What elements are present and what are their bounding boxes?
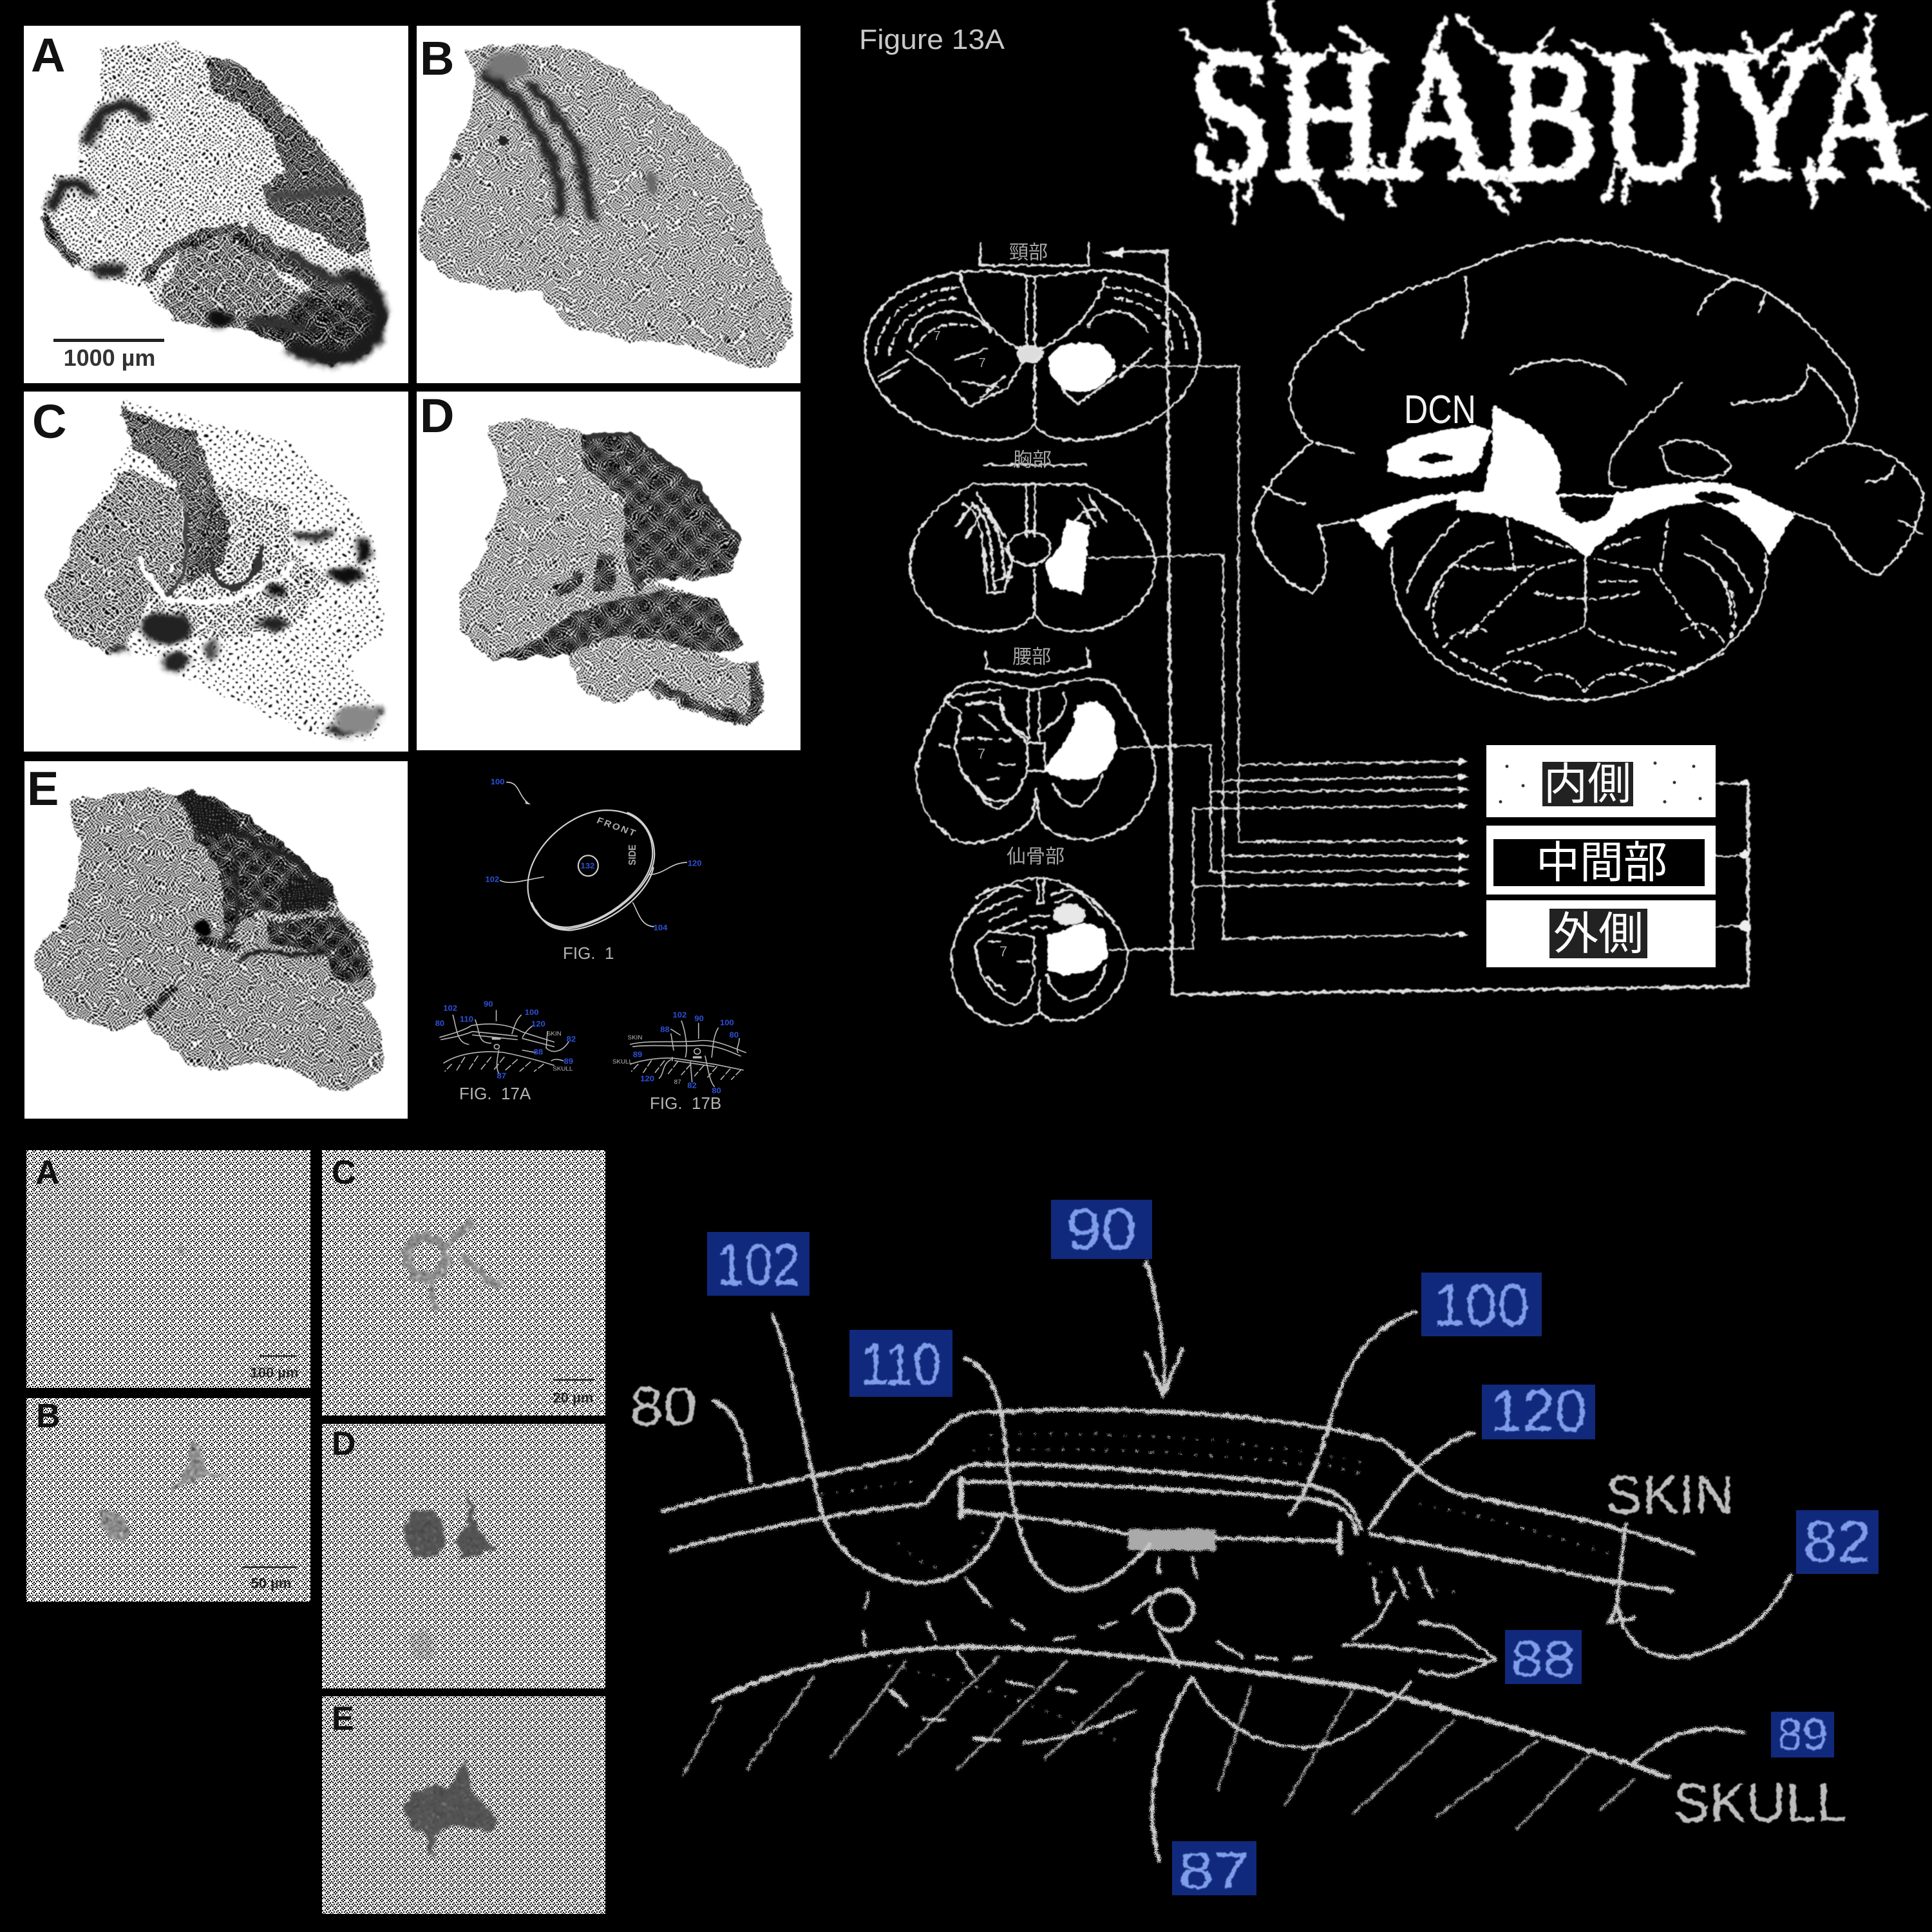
panel: cerebellum C [24,392,408,752]
anatomy words: SKIN [547,1030,562,1037]
blue numbers [633,1011,739,1095]
section: cervical [865,243,1200,440]
scale text: 100 µm [250,1365,299,1381]
heading: figure 13A: Figure 13A [859,24,1005,55]
box: medial [1486,745,1716,817]
figure: large sketch of implant under skin [630,1197,1879,1899]
section labels: 7 [978,746,985,762]
anatomy words: 87 [674,1079,681,1085]
blue numbers: 120 [531,1020,545,1028]
caption FIG. 17B: FIG. 17B [650,1094,721,1113]
blue label boxes [707,1200,1879,1895]
handwritten blue numbers [717,1197,1871,1899]
panel: cerebellum B [417,26,800,383]
scale text: 50 µm [251,1575,291,1591]
handwritten blue numbers: 87 [1179,1842,1249,1899]
section labels [933,242,1065,960]
section labels: 頸部 [1009,242,1048,263]
blue numbers: 104 [654,923,668,932]
sketch lines [662,1263,1790,1861]
figure: FIG. 1 disc device [486,777,702,963]
label: E [332,1700,354,1738]
blue numbers: 102 [443,1004,457,1012]
text: lateral: 外側 [1553,909,1643,959]
section: thoracic [911,465,1155,631]
box: lateral [1486,900,1716,967]
panel: cerebellum E [24,761,408,1119]
caption FIG. 1: FIG. 1 [563,943,614,963]
text: medial: 内側 [1544,760,1631,809]
handwritten anatomy words: SKIN [1605,1464,1734,1525]
blue numbers: 110 [460,1015,473,1023]
blue numbers: 82 [567,1035,576,1043]
caption FIG. 17A: FIG. 17A [459,1084,531,1103]
blue numbers: 102 [672,1011,687,1019]
blue numbers: 80 [730,1031,739,1039]
section labels: 腰部 [1012,647,1051,668]
scale bar [553,1379,594,1381]
blue numbers: 100 [720,1019,734,1027]
DCN label: DCN [1404,388,1476,432]
blue numbers [486,777,702,932]
arrowheads [1103,247,1751,938]
handwritten anatomy words: 80 [630,1376,697,1437]
label B: B [420,32,454,85]
anatomy words [612,1034,681,1085]
anatomy words [547,1030,573,1072]
handwritten anatomy words [630,1376,1847,1833]
blue numbers: 89 [633,1050,642,1059]
handwritten blue numbers: 100 [1433,1273,1530,1338]
blue numbers: 120 [688,859,702,867]
engraved front: FRONT [595,816,638,839]
micrograph panel D [322,1424,605,1689]
scale bar [242,1566,297,1568]
handwritten anatomy words: SKULL [1673,1772,1847,1833]
label C: C [32,395,66,448]
section labels: 7 [999,943,1007,960]
anatomy words: SKULL [553,1066,573,1072]
section: sacral [952,878,1128,1025]
blue numbers: 89 [564,1057,573,1066]
blue numbers [435,999,576,1081]
engraved side: SIDE [627,844,638,866]
scale text: 20 µm [553,1390,593,1406]
anatomy words: SKULL [612,1059,632,1065]
anatomy words: SKIN [628,1034,642,1041]
micrograph panel E [322,1696,605,1914]
handwritten blue numbers: 82 [1803,1509,1871,1575]
label D: D [420,389,454,442]
handwritten blue numbers: 120 [1490,1378,1587,1444]
label: D [332,1425,356,1463]
micrograph panel C [322,1150,605,1416]
blue numbers: 100 [525,1009,539,1017]
box: intermediate [1486,826,1716,895]
connectors [1088,251,1748,994]
label E: E [27,762,59,815]
handwritten blue numbers: 110 [860,1332,942,1397]
blue numbers: 90 [694,1014,704,1023]
handwritten blue numbers: 88 [1511,1630,1575,1687]
handwritten blue numbers: 90 [1066,1197,1137,1262]
blue numbers: 80 [712,1086,721,1095]
blue numbers: 82 [687,1081,697,1090]
label A: A [31,28,65,82]
handwritten blue numbers: 102 [717,1232,800,1298]
blue numbers: 120 [640,1075,654,1083]
blue numbers: 87 [497,1072,506,1081]
handwritten blue numbers: 89 [1777,1709,1828,1759]
diagram: spinal sections and connectors [865,243,1751,1025]
scale bar [259,1355,297,1357]
section labels: 仙骨部 [1007,846,1065,867]
figure: FIG. 17B small sketch [612,1011,746,1113]
label: B [36,1397,61,1435]
blue numbers: 100 [491,777,505,786]
panel: cerebellum D [417,389,800,750]
blue numbers: 88 [534,1048,543,1056]
blue numbers: 80 [435,1019,444,1028]
section labels: 7 [933,329,941,343]
micrograph panel A [26,1150,310,1388]
figure: FIG. 17A small sketch [435,999,576,1103]
section: lumbar [916,649,1155,844]
scale bar [53,339,164,342]
section labels: 7 [978,356,986,370]
scale text: 1000 µm [64,345,155,371]
text: intermediate: 中間部 [1536,838,1667,887]
label: A [35,1154,60,1191]
blue numbers: 88 [660,1025,670,1034]
blue numbers: 132 [581,862,595,870]
micrograph panel B [26,1397,310,1602]
section labels: 胸部 [1013,450,1052,471]
diagram: brain with DCN [1253,240,1923,701]
panel: cerebellum A [24,26,408,383]
blue numbers: 90 [484,999,493,1009]
label: C [332,1154,356,1191]
blue numbers: 102 [486,875,499,884]
